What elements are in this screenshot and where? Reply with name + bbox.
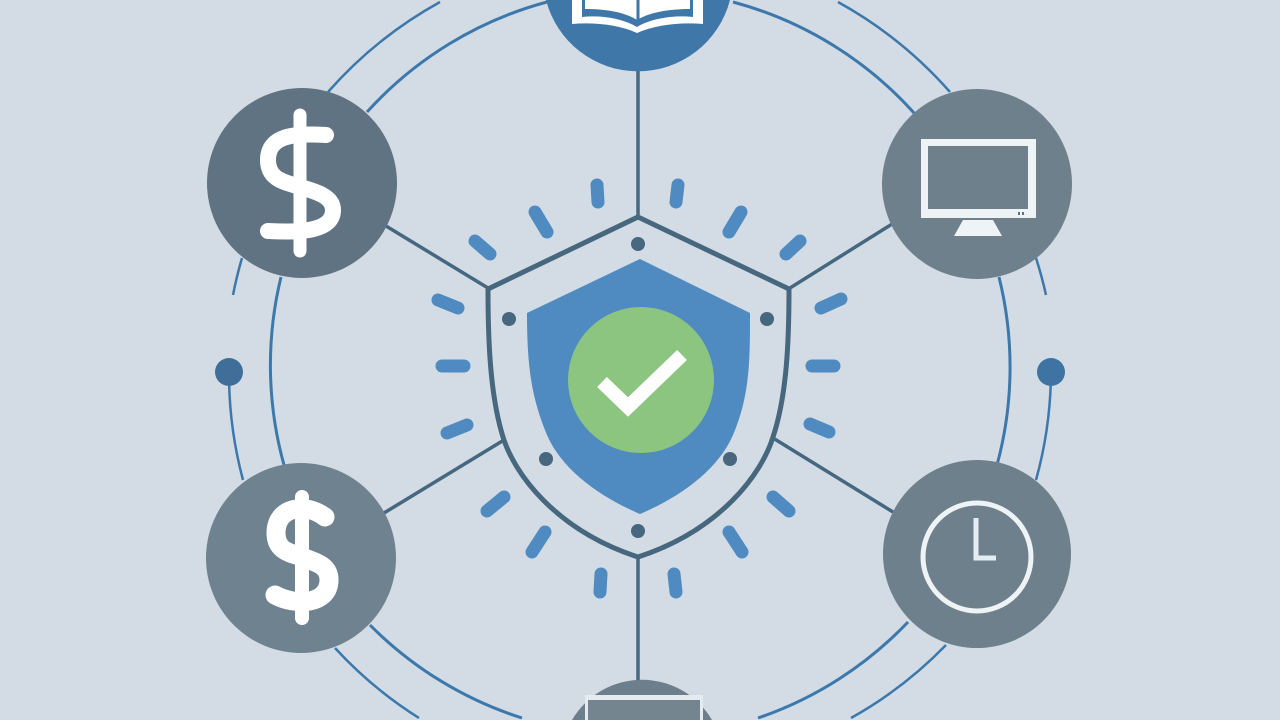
bottom node: monitor (572, 680, 712, 720)
bottom-right node: clock (883, 460, 1071, 648)
bottom-left node: dollar (206, 463, 396, 653)
outer ring arcs (229, 2, 1051, 718)
top-right node: monitor (882, 89, 1072, 279)
connector lines (384, 70, 893, 684)
left ring node (215, 358, 243, 386)
right ring node (1037, 358, 1065, 386)
radiating ticks (438, 185, 841, 592)
check mark (602, 355, 682, 407)
inner ring arcs (270, 2, 1010, 718)
green badge (568, 307, 714, 453)
inner shield (527, 259, 750, 514)
shield rivets (502, 237, 774, 538)
top node: book (546, 0, 730, 71)
top-left node: dollar (207, 88, 397, 278)
shield outline (488, 217, 789, 557)
